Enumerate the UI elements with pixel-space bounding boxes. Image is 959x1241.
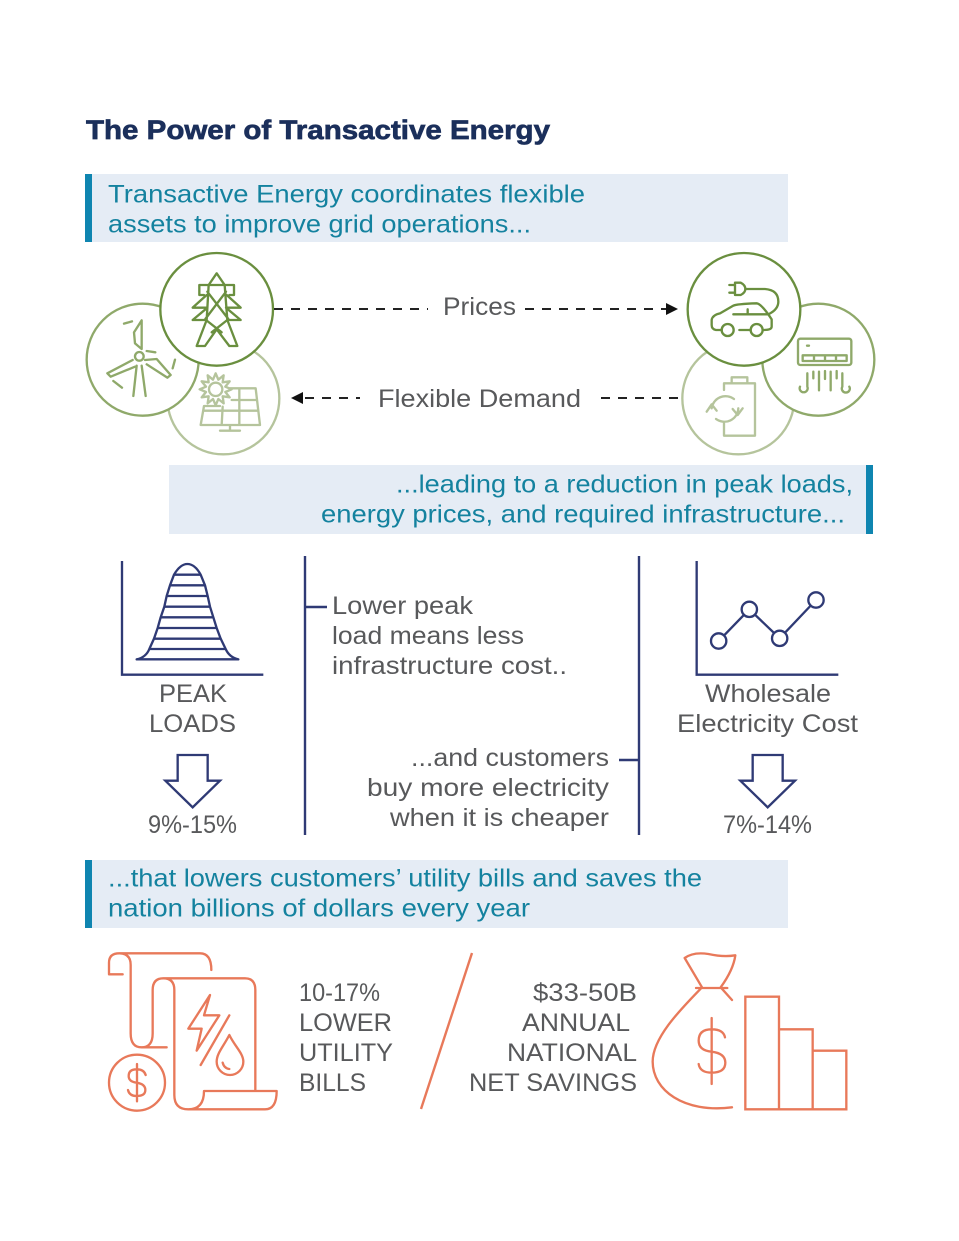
label: prices: Prices [443,293,516,321]
banner: reduction in peak loads [169,465,873,534]
text: lower utility bills: BILLS [299,1069,366,1097]
text: lower peak load: load means less [332,622,524,650]
icon: air conditioner [762,304,874,416]
text: annual national net savings: NET SAVINGS [469,1069,637,1097]
panel: peak loads [122,561,263,839]
icon: wind turbine [87,304,199,416]
text: annual national net savings: NATIONAL [507,1039,637,1067]
chart: cost line [697,561,838,675]
text: annual national net savings: $33-50B [533,979,637,1007]
label: peak loads [149,680,236,738]
banner: lowers utility bills: ...that lowers customers’ utility bills and saves the [108,864,702,892]
icon: down arrow [165,755,220,807]
label: flexible demand: Flexible Demand [378,385,581,413]
icon: battery [682,342,794,454]
chart: peak load curve [122,561,263,675]
banner: reduction in peak loads: ...leading to a reduction in peak loads, [396,470,853,498]
arrow: prices to customers [274,303,678,315]
dividers with callout ticks [305,556,639,835]
label: wholesale electricity cost [677,680,858,738]
banner: coordinates flexible assets: assets to improve grid operations... [108,210,531,238]
text: lower peak load [332,592,567,680]
text: lower utility bills [299,979,393,1097]
text: lower peak load: infrastructure cost.. [332,652,567,680]
icon: transmission tower [160,253,273,366]
label: wholesale electricity cost: Wholesale [705,680,831,708]
arrow: flexible demand to grid [291,392,682,404]
car and plug glyph [712,283,778,336]
banner: reduction in peak loads: energy prices, and required infrastructure... [321,500,845,528]
icon: solar panel [167,342,279,454]
text: customers buy more: buy more electricity [367,774,610,802]
icon: money bag with falling bars [653,953,846,1109]
banner: coordinates flexible assets: Transactive Energy coordinates flexible [108,180,585,208]
text: lower utility bills: 10-17% [299,979,380,1007]
text: annual national net savings [469,979,637,1097]
text: customers buy more [367,744,610,832]
text: customers buy more: ...and customers [411,744,609,772]
icon: down arrow [740,755,795,807]
grid assets icon cluster [87,253,874,454]
text: annual national net savings: ANNUAL [522,1009,630,1037]
text: lower utility bills: LOWER [299,1009,392,1037]
icon: utility bill scroll with dollar coin [109,953,277,1111]
label: wholesale electricity cost: Electricity Cost [677,710,858,738]
title: The Power of Transactive Energy [86,115,550,145]
text: lower utility bills: UTILITY [299,1039,393,1067]
text: customers buy more: when it is cheaper [389,804,609,832]
label: peak loads: PEAK [159,680,227,708]
label: peak loads: LOADS [149,710,236,738]
text: lower peak load: Lower peak [332,592,474,620]
banner: lowers utility bills: nation billions of dollars every year [108,894,530,922]
banner: lowers utility bills [85,860,788,928]
value: peak load reduction: 9%-15% [148,811,237,839]
icon: electric car [688,253,800,366]
panel: wholesale electricity cost [677,561,858,839]
banner: coordinates flexible assets [85,174,788,242]
value: wholesale cost reduction: 7%-14% [723,811,812,839]
divider slash [421,953,472,1109]
